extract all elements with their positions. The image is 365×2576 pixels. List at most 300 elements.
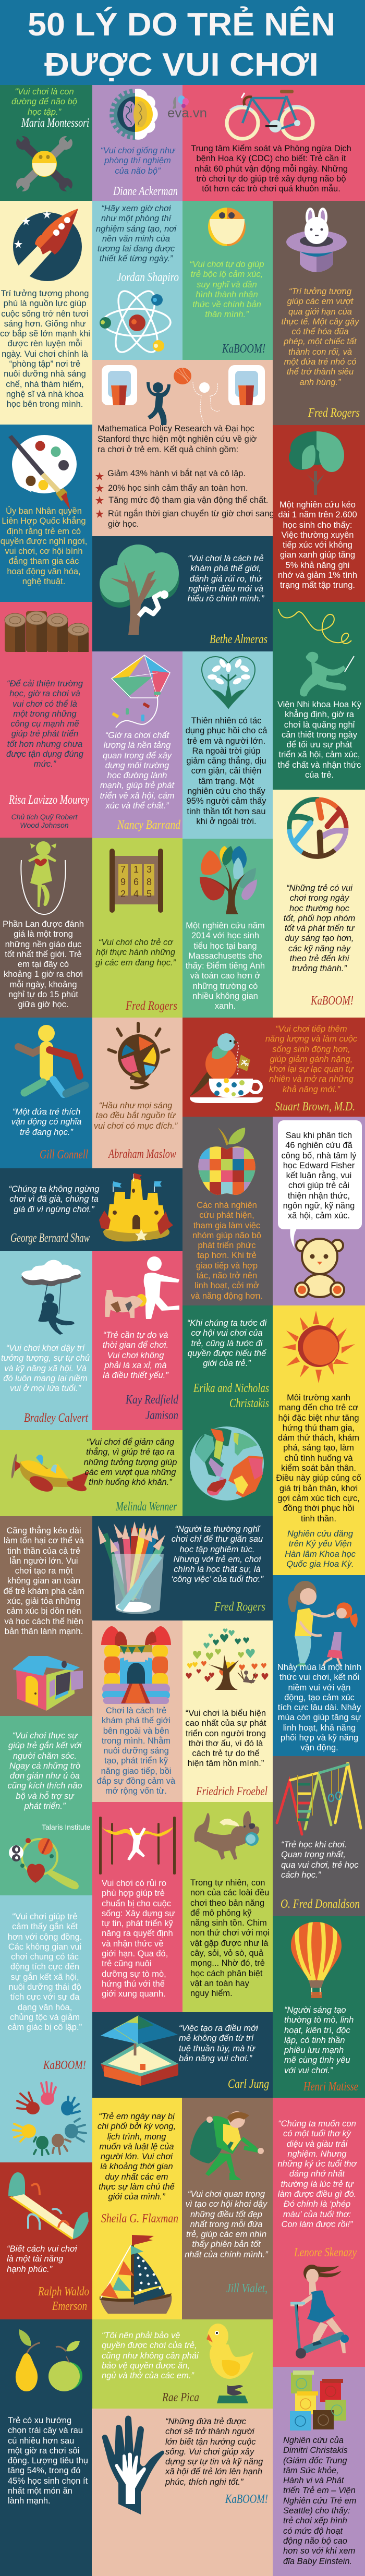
text: Chơi là cách trẻ	[106, 1706, 166, 1715]
text: đẳng tham gia các	[9, 557, 79, 566]
text: giảm căng thẳng, dịu	[186, 756, 266, 766]
author: Emerson	[52, 2300, 87, 2313]
watermark: eva.vn: eva.vn	[167, 106, 207, 120]
panel: Abraham Maslow quote	[92, 1018, 182, 1168]
icon: sandbox with umbrella	[101, 2016, 178, 2086]
quote: thân mình.”	[205, 310, 249, 319]
quote: một trong những	[13, 709, 77, 719]
icon: girl jump rope	[20, 841, 66, 915]
author: Bethe Almeras	[210, 633, 267, 646]
quote: “Vui chơi tự do giúp	[189, 260, 264, 269]
text	[98, 424, 257, 454]
text: (Giám đốc Trung	[283, 2456, 347, 2465]
quote: năng lượng và làm cuộc	[265, 1034, 357, 1044]
source: Nghiên cứu đăng	[287, 1529, 353, 1539]
text: Trẻ có xu hướng	[8, 2416, 71, 2425]
text: nuôi dưỡng nhà sáng	[4, 369, 86, 379]
quote: phúc, thích nghi tốt.”	[165, 2477, 244, 2487]
icon: heart tree swing: ♥	[205, 1650, 214, 1663]
text: học sinh cho thấy:	[283, 521, 352, 530]
text: của trẻ.	[305, 770, 334, 780]
quote: hơn với cộng đồng.	[8, 1932, 82, 1942]
source: trên Kỷ yếu Viện	[289, 1539, 351, 1549]
icon: monkey bars	[99, 1817, 176, 1874]
quote: ngủ và thở của các em.”	[102, 2371, 194, 2380]
icon: sun	[282, 1311, 355, 1383]
quote: người chăm sóc.	[13, 1751, 77, 1761]
icon: sailboat	[100, 2235, 172, 2314]
author: Nancy Barrand	[117, 818, 181, 832]
text	[182, 1201, 271, 1301]
text: động. Lượng tiêu thụ	[8, 2456, 88, 2465]
text: giới hạn. Qua đó,	[102, 1949, 168, 1958]
quote	[92, 938, 179, 968]
panel: Jill Vialet quote	[182, 2098, 273, 2319]
icon: heart tree swing: ♥	[234, 1637, 241, 1647]
quote: “Vui chơi cho trẻ cơ	[99, 938, 173, 947]
quote: nghiệm sáng tạo, nơi	[96, 224, 176, 234]
quote: của não bộ”	[115, 166, 161, 176]
quote: sự gắn kết xã hội,	[10, 1973, 79, 1982]
panel: Kay Redfield Jamison quote	[92, 1251, 182, 1430]
quote	[261, 1024, 362, 1095]
text: thấy: Điểm tiếng Anh	[186, 961, 265, 971]
text: Ủy ban Nhân quyền	[6, 506, 82, 516]
panel: Ralph Waldo Emerson quote	[0, 2162, 92, 2319]
text: giao tiếp và hợp	[196, 1261, 258, 1271]
text: khoảng 1 giờ ra chơi	[4, 970, 83, 979]
icon: swing set	[276, 1761, 362, 1835]
icon: heart tree swing: ♥	[251, 1662, 258, 1672]
panel: green environment sun	[273, 1305, 365, 1575]
quote: tốt, phối hợp nhóm	[284, 914, 355, 923]
quote: chi phối bởi kỳ vọng,	[98, 2122, 176, 2131]
panel: Melinda Wenner quote	[0, 1430, 182, 1516]
panel: Rae Pica quote	[92, 2319, 273, 2409]
panel: Gill Gonnell quote	[0, 1018, 92, 1168]
source: Quốc gia Hoa Kỳ.	[286, 1559, 354, 1569]
icon: runner	[14, 1025, 87, 1098]
icon: pencil cup	[99, 1521, 165, 1614]
text: hoạt động văn hóa,	[7, 567, 81, 576]
author: Jordan Shapiro	[117, 271, 179, 284]
text: nuôi dưỡng sáng	[103, 1746, 169, 1756]
text: nhớ và giảm 1% tình	[278, 571, 357, 580]
icon: child with yarn	[277, 605, 359, 690]
icon: superhero child	[190, 2112, 265, 2180]
quote: làm được điều gì đó.	[278, 2190, 356, 2199]
text: khám phá thế giới	[102, 1716, 171, 1725]
quote: lập, có tinh thần	[284, 2036, 345, 2045]
quote: tình huống khó khăn.”	[89, 1478, 172, 1487]
text: Trong tự nhiên, con	[190, 1878, 265, 1888]
quote	[7, 2244, 77, 2275]
text: tạp hơn. Khi trẻ	[197, 1251, 257, 1260]
text	[191, 144, 351, 193]
quote: “Vui chơi là cách trẻ	[188, 554, 264, 563]
icon: abacus board: 4	[133, 889, 139, 899]
icon: heart tree swing: ♥	[204, 1674, 211, 1684]
icon: abacus board: 2	[120, 889, 126, 899]
icon: heart tree swing: ♥	[185, 1671, 192, 1681]
quote: bản năng vui chơi.”	[179, 2054, 252, 2063]
icon: heart tree swing: ♥	[242, 1636, 250, 1646]
text	[186, 716, 267, 826]
quote: phiêu lưu mạnh	[284, 2046, 344, 2055]
quote: hiện tâm hồn mình.”	[188, 1759, 264, 1768]
icon: toy blocks	[290, 2371, 348, 2432]
panel: green space study	[273, 425, 365, 602]
text: phù hợp giúp trẻ	[102, 1889, 165, 1898]
text: tinh thần tốt hơn sau	[187, 807, 266, 816]
text: cuộc sống trở nên tươi	[1, 309, 89, 319]
panel: Bethe Almeras quote	[92, 536, 273, 651]
author: KaBOOM!	[310, 994, 354, 1008]
quote: quyền được hiểu thế	[188, 1349, 266, 1358]
quote: tuệ thuần túy, mà từ	[179, 2044, 255, 2053]
quote	[179, 2024, 258, 2064]
quote: học đường lành	[107, 771, 167, 780]
quote: diệu và giàu trải	[287, 2139, 347, 2149]
text: giới xung quanh.	[102, 1989, 166, 1999]
text: triển Trẻ em – Viện	[283, 2486, 356, 2495]
text: cảm xúc bị dồn nén	[6, 1606, 81, 1616]
panel: Finland	[0, 838, 92, 1018]
text: đồng thời phục hồi	[283, 1504, 354, 1513]
quote	[96, 204, 176, 263]
quote: chơi vì đã già, chúng ta	[9, 1194, 99, 1204]
quote: bộ và hỗ trợ sự	[16, 1792, 74, 1801]
text: nguy hiểm.	[190, 1989, 233, 1998]
icon: playhouse	[13, 1656, 81, 1711]
text: nhóm giúp não bộ	[192, 1231, 261, 1240]
quote: đường để não bộ	[11, 97, 77, 106]
quote	[189, 260, 264, 319]
text: Stanford thực hiện một nghiên cứu về giờ	[98, 434, 257, 444]
quote: triển con người trong	[186, 1729, 266, 1738]
icon: abacus board: 9	[120, 877, 126, 887]
text: triển xã hội, cảm xúc,	[279, 750, 360, 759]
icon: heart tree swing: ♥	[252, 1673, 259, 1681]
quote: dạng văn hóa,	[18, 2003, 72, 2012]
text: nhiều không gian	[192, 991, 258, 1001]
quote: hạnh phúc.”	[7, 2265, 52, 2274]
source: Hàn lâm Khoa học	[285, 1550, 356, 1559]
icon: abacus board: 5	[147, 889, 152, 899]
icon: heart tree swing: ♥	[212, 1638, 220, 1648]
author title: Chủ tịch Quỹ Robert	[11, 813, 77, 821]
text: xúc, giải tỏa những	[7, 1597, 80, 1606]
icon: cloud and swing	[19, 1255, 81, 1334]
text: trẻ em và người lớn.	[187, 736, 265, 746]
icon: tree	[289, 431, 344, 495]
text: Viện Nhi khoa Hoa Kỳ	[277, 700, 361, 709]
icon: hand prints	[13, 2081, 87, 2155]
text: 46 nghiên cứu đã	[285, 1141, 352, 1150]
icon: heart tree swing: ♥	[192, 1661, 198, 1670]
quote: cũng kích thích não	[7, 1781, 82, 1791]
author: Abraham Maslow	[107, 1147, 176, 1161]
icon: heart tree swing: ♥	[192, 1649, 202, 1662]
text: học cách phân biệt	[190, 1969, 263, 1978]
text: Các nhà nghiên	[197, 1201, 257, 1210]
text: phú là nguồn lực giúp	[4, 299, 86, 308]
quote	[100, 731, 175, 811]
icon: heart tree swing: ♥	[261, 1662, 267, 1671]
author: Erika and Nicholas	[193, 1382, 269, 1395]
text: tiếp xúc với không	[283, 540, 352, 550]
text: em tại đây có	[18, 960, 69, 969]
text: gợi cảm xúc tích cực,	[277, 1494, 360, 1503]
text	[0, 920, 87, 1010]
quote: “Vui chơi giúp trẻ	[13, 1912, 77, 1921]
quote: bảo vệ quyền được ăn,	[102, 2361, 190, 2371]
quote: nhất trong mỗi đứa	[190, 2220, 262, 2229]
text	[0, 289, 90, 409]
text: dài 1 năm trên 2.600	[278, 510, 357, 519]
icon: teddy bear	[295, 1238, 345, 1299]
icon: kite	[111, 655, 171, 728]
panel: Dimitri Christakis study	[273, 2367, 365, 2576]
author: Fred Rogers	[125, 999, 177, 1013]
author: Kay Redfield	[125, 1393, 179, 1407]
text: giá là một trong	[14, 929, 73, 939]
icon: toy plane	[10, 1454, 90, 1492]
quote: là một tài năng	[7, 2254, 63, 2264]
quote: “Trí tưởng tượng	[289, 287, 351, 296]
quote: một đứa trẻ nhỏ có	[284, 357, 356, 367]
quote: màu’ của tuổi thơ:	[283, 2210, 351, 2219]
text: Căng thẳng kéo dài	[6, 1526, 81, 1535]
panel: imagination rocket	[0, 201, 92, 425]
text: Mathematica Policy Research và Đại học	[98, 424, 254, 433]
author title: Wood Johnson	[20, 821, 69, 829]
quote: Nhưng với trẻ em, chơi	[174, 1555, 261, 1564]
icon: heart tree swing: ♥	[237, 1650, 245, 1660]
author: George Bernard Shaw	[10, 1231, 90, 1245]
panel: O. Fred Donaldson quote	[273, 1756, 365, 1916]
quote: nghiệm điều mới và	[188, 584, 263, 594]
text: Thiên nhiên có tác	[191, 716, 261, 725]
quote: các em vượt qua những	[85, 1468, 176, 1477]
author: KaBOOM!	[222, 342, 265, 356]
panel: KaBOOM hand quote	[92, 2409, 273, 2576]
quote: ‘công việc’ của tuổi thơ.”	[171, 1575, 263, 1584]
quote: nuôi dưỡng thái độ	[8, 1982, 81, 1992]
quote	[92, 2112, 181, 2203]
quote: Vui chơi không	[107, 1351, 164, 1360]
quote: thực sự làm chủ thế	[99, 2182, 175, 2192]
quote: cách học.”	[281, 1870, 321, 1880]
panel: Henri Matisse quote	[273, 1916, 365, 2098]
quote: mẽ cùng tình yêu	[284, 2055, 350, 2065]
text: tăng 54%, trong đó	[8, 2466, 80, 2475]
quote: các kỹ năng này	[288, 944, 350, 953]
text: Dimitri Christakis	[283, 2446, 348, 2455]
text: Việc thường xuyên	[282, 530, 354, 540]
text	[273, 1393, 364, 1524]
quote: muốn và luật lệ của	[99, 2142, 174, 2151]
quote: dựng sự tự tin và kỹ năng	[165, 2457, 263, 2466]
panel: George Bernard Shaw quote	[0, 1168, 182, 1251]
text: lẫn người lớn. Vui	[9, 1556, 78, 1566]
quote: “Vui chơi là con	[15, 87, 74, 96]
bullet: safety: 20% học sinh cảm thấy an toàn hơn.	[108, 483, 248, 493]
text: Một nghiên cứu kéo	[279, 500, 356, 510]
text: chủ tình huống và	[284, 1454, 353, 1463]
text: làm tổn hại cơ thể và	[4, 1536, 84, 1545]
quote	[282, 287, 360, 387]
text: một giờ ra chơi sôi	[8, 2446, 79, 2456]
quote: thường tò mò, linh	[284, 2015, 354, 2025]
author: Sheila G. Flaxman	[101, 2212, 178, 2226]
watermark: eva.vn	[167, 95, 207, 119]
panel: CDC bicycle	[182, 85, 365, 201]
quote: thời gian để chơi.	[103, 1340, 168, 1350]
quote: suy nghĩ và dần	[197, 280, 257, 289]
text: Ra ngoài trời giúp	[192, 746, 260, 756]
icon: rocket	[13, 209, 82, 281]
icon: abacus board: 3	[147, 864, 152, 875]
text: vui chơi, cơ hội bình	[5, 547, 83, 556]
icon: stained glass bulb	[106, 1022, 171, 1091]
text: “phòng tập” nơi trẻ	[9, 359, 80, 369]
icon: abacus board	[110, 849, 163, 913]
text: học bên trong mình.	[7, 400, 83, 409]
text: 45% học sinh chọn ít	[8, 2476, 88, 2486]
icon: heart tree swing: ♥	[261, 1672, 269, 1683]
text: 2014 với học sinh	[191, 931, 259, 940]
quote: duy nhất các em	[105, 2172, 168, 2182]
text: hơn so với khi xem	[283, 2546, 355, 2556]
text: cây, sỏi, vỏ sò, quả	[190, 1949, 263, 1958]
text: hội đặc biệt như tăng	[278, 1413, 359, 1423]
text: tinh thần.	[301, 1514, 336, 1523]
quote: những điều tốt đẹp	[190, 2210, 262, 2219]
text: và năng động hơn.	[191, 1291, 263, 1301]
author: Rae Pica	[162, 2391, 199, 2404]
quote	[6, 679, 83, 769]
quote: đáng nhớ nhất	[289, 2169, 345, 2179]
text: kết luận rằng, vui	[286, 1171, 351, 1180]
author: Melinda Wenner	[115, 1500, 177, 1514]
quote: cách trẻ tự do thể	[192, 1749, 260, 1758]
text: vận động.	[300, 1743, 338, 1752]
quote: nhiên và mở ra những	[269, 1074, 354, 1084]
text: tốt hơn các trò chơi quá khuôn mẫu.	[202, 184, 340, 193]
text: năng ra quyết định	[102, 1929, 173, 1938]
source	[273, 1529, 365, 1569]
quote: nền văn minh của	[102, 234, 170, 244]
text	[92, 1706, 180, 1797]
quote: thấy phiên bản tốt	[192, 2240, 261, 2249]
text	[283, 2436, 356, 2567]
quote: “Vui chơi thực sự	[12, 1731, 78, 1740]
text: Seattle) cho thấy:	[283, 2506, 350, 2515]
title banner	[0, 0, 365, 85]
text: sáng hơn. Giống như	[4, 319, 86, 329]
icon: smile	[208, 208, 246, 246]
text: Một nghiên cứu năm	[186, 921, 265, 930]
author: Carl Jung	[228, 2077, 269, 2091]
author: KaBOOM!	[43, 2059, 86, 2072]
text: niềm vui với vận	[288, 1683, 350, 1692]
quote: mẻ không đến từ trí	[179, 2034, 253, 2043]
panel: Jordan Shapiro quote	[92, 201, 182, 360]
quote: vui chơi có thể là	[13, 699, 77, 709]
panel: KaBOOM free play	[182, 201, 273, 360]
quote: duy sáng tạo hơn,	[285, 934, 354, 943]
quote: chơi trong ngày	[290, 893, 349, 903]
text: và nhận thức về	[102, 1939, 163, 1949]
quote: sống. Vui chơi giúp xây	[165, 2447, 254, 2457]
icon: abacus board: 8	[147, 877, 152, 887]
quote: người lớn. Vui chơi	[101, 2152, 173, 2161]
icon: abacus board: 6	[133, 877, 139, 887]
text: bên ngoài và bên	[103, 1726, 169, 1736]
quote	[0, 1107, 93, 1138]
text	[8, 2416, 88, 2507]
quote: giới của trẻ.”	[203, 1359, 251, 1368]
text: quyền được nghỉ ngơi,	[1, 537, 87, 546]
quote: “Hầu như mọi sáng	[99, 1101, 172, 1110]
author: Talaris Institute	[42, 1823, 90, 1831]
text: non thử chơi với mọi	[190, 1928, 270, 1938]
text	[190, 1878, 270, 1999]
text: Liên Hợp Quốc khẳng	[2, 516, 86, 526]
panel: Fred Rogers practice	[92, 838, 182, 1018]
text: mở rộng vốn từ.	[105, 1786, 167, 1796]
quote: Đó chính là ‘phép	[284, 2199, 350, 2209]
quote	[0, 1731, 90, 1811]
author: Jill Vialet,	[226, 2282, 267, 2295]
panel: KaBOOM hands wheel	[273, 790, 365, 1018]
icon: rubber duck	[206, 2324, 256, 2403]
bullet: physical activity: Tăng mức độ tham gia vận động thể chất.	[108, 495, 268, 505]
speech bubble	[278, 1120, 362, 1251]
quote	[0, 1912, 90, 2033]
quote: “Biết cách vui chơi	[7, 2244, 77, 2254]
quote: động tích cực đến	[10, 1962, 79, 1972]
text: trẻ chơi xếp hình	[283, 2516, 347, 2525]
panel: Massachusetts study	[182, 839, 273, 1018]
author: Bradley Calvert	[24, 1411, 89, 1425]
text: năng giao tiếp, bồi	[101, 1767, 171, 1776]
quote: khơi lại sự lạc quan tự	[269, 1065, 354, 1074]
quote: cảm giác bị cô lập.”	[8, 2023, 82, 2032]
panel: Maria Montessori quote	[0, 85, 92, 201]
panel: Diane Ackerman quote	[92, 85, 182, 201]
quote: với vui chơi.”	[284, 2066, 333, 2075]
quote: Ngay cả những trò	[9, 1761, 80, 1771]
text: để trẻ khám phá cảm	[3, 1587, 84, 1596]
quote: phải là xa xỉ, mà	[104, 1361, 167, 1370]
text: tâm Sức khỏe,	[283, 2466, 339, 2475]
text: và toán cao hơn ở	[190, 971, 260, 981]
text: nhất 60 phút vận động mỗi ngày. Những	[194, 164, 348, 174]
text: mỗi ngày, khoảng	[9, 980, 77, 989]
quote: “Người ta thường nghĩ	[175, 1525, 259, 1534]
text: Vui chơi có rủi ro	[102, 1879, 166, 1888]
text: và học cách thể hiện	[4, 1617, 83, 1626]
quote	[11, 87, 77, 117]
text: hứng thú với thế	[102, 1979, 165, 1989]
text: tinh thần của cả trẻ	[7, 1546, 80, 1556]
text: sống: Xây dựng sự	[102, 1909, 175, 1918]
text: Nghiên cứu Trẻ em	[283, 2496, 356, 2506]
icon: atom	[100, 290, 172, 353]
text: Môi trường xanh	[287, 1393, 350, 1402]
